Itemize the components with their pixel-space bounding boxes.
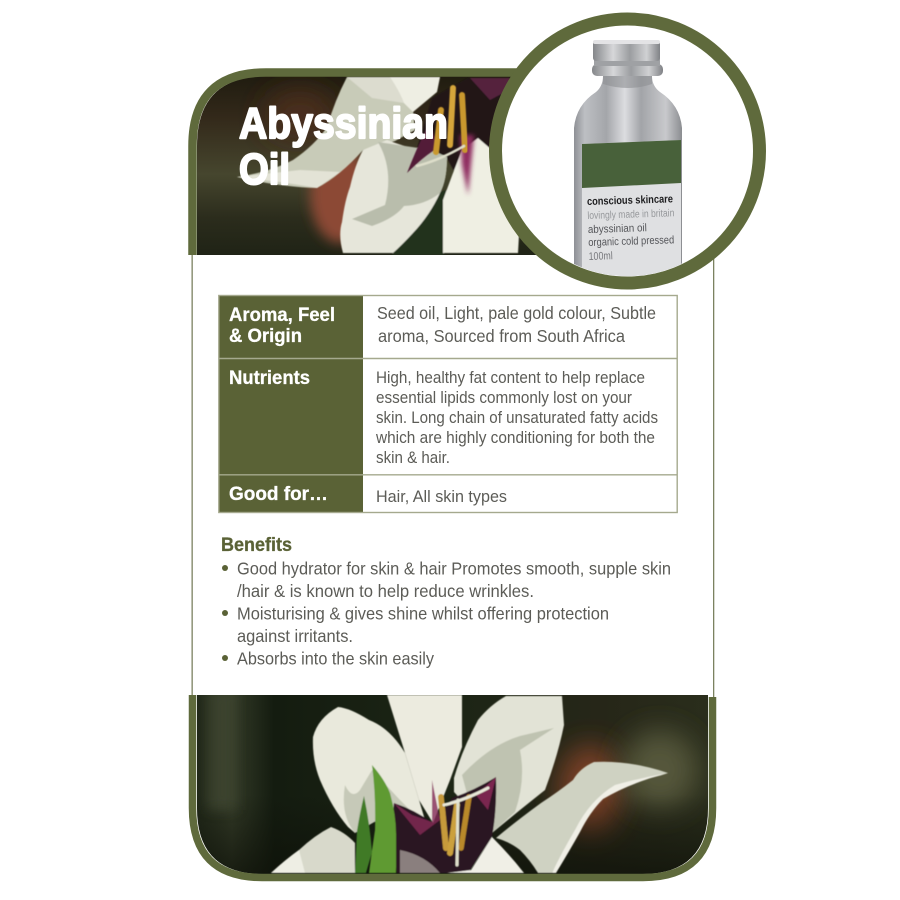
benefits list: Absorbs into the skin easily bbox=[237, 648, 434, 668]
row: nutrients: essential lipids commonly lost on your bbox=[376, 389, 632, 407]
row: nutrients bbox=[229, 367, 658, 467]
row: aroma bbox=[229, 303, 656, 347]
title: Abyssinian bbox=[239, 99, 448, 148]
row: aroma: aroma, Sourced from South Africa bbox=[378, 326, 625, 346]
benefits heading: Benefits bbox=[221, 535, 292, 556]
bottom photo: white flower bbox=[190, 690, 715, 880]
far right petal bbox=[496, 762, 668, 873]
right petal bbox=[443, 138, 519, 253]
right petal bbox=[454, 696, 564, 833]
lower centre petal bbox=[447, 837, 524, 873]
benefits list bbox=[222, 558, 671, 668]
benefits list: Good hydrator for skin & hair Promotes smooth, supple skin bbox=[237, 558, 671, 578]
benefits list: Moisturising & gives shine whilst offering protection bbox=[237, 604, 609, 624]
green leaves bbox=[369, 765, 396, 873]
benefits bbox=[221, 535, 671, 668]
lower left petal bbox=[271, 827, 355, 873]
bottom frame border bbox=[192, 695, 712, 878]
label text bbox=[587, 193, 676, 263]
row: good for bbox=[229, 483, 507, 506]
table bbox=[219, 296, 677, 512]
upper left petal bbox=[237, 77, 415, 188]
benefits list: /hair & is known to help reduce wrinkles. bbox=[237, 581, 534, 601]
stamens bbox=[441, 788, 488, 865]
label text: organic cold pressed bbox=[588, 234, 674, 249]
dark gap and centre bbox=[392, 190, 447, 255]
top photo: white flower bbox=[197, 76, 536, 255]
top frame border bbox=[192, 72, 560, 255]
row: nutrients: skin & hair. bbox=[376, 449, 450, 467]
left petal bbox=[313, 707, 425, 833]
dark centre bbox=[393, 777, 496, 873]
benefits list: against irritants. bbox=[237, 626, 353, 646]
label bbox=[582, 140, 681, 276]
bottle bbox=[574, 40, 682, 300]
row: aroma: & Origin bbox=[229, 325, 302, 347]
label text: conscious skincare bbox=[587, 193, 673, 208]
purple streaks bbox=[406, 130, 435, 174]
row: nutrients: which are highly conditioning for both the bbox=[375, 429, 655, 447]
card side rules bbox=[192, 250, 714, 698]
label text: abyssinian oil bbox=[588, 222, 647, 236]
label text: 100ml bbox=[589, 250, 613, 263]
row: nutrients: High, healthy fat content to help replace bbox=[376, 369, 645, 387]
product circle bbox=[496, 19, 760, 300]
stamens bbox=[417, 88, 465, 166]
row: nutrients: Nutrients bbox=[229, 367, 310, 389]
row: aroma: Seed oil, Light, pale gold colour, Subtle bbox=[377, 303, 656, 323]
row: nutrients: skin. Long chain of unsaturated fatty acids bbox=[376, 409, 658, 427]
title bbox=[239, 99, 448, 194]
top petal bbox=[387, 695, 462, 823]
row: aroma: Aroma, Feel bbox=[229, 304, 335, 326]
title: Oil bbox=[239, 145, 290, 194]
row: good for: Hair, All skin types bbox=[376, 488, 507, 506]
row: good for: Good for… bbox=[229, 483, 328, 505]
big lower petal bbox=[340, 140, 447, 253]
label text: lovingly made in britain bbox=[587, 207, 675, 222]
